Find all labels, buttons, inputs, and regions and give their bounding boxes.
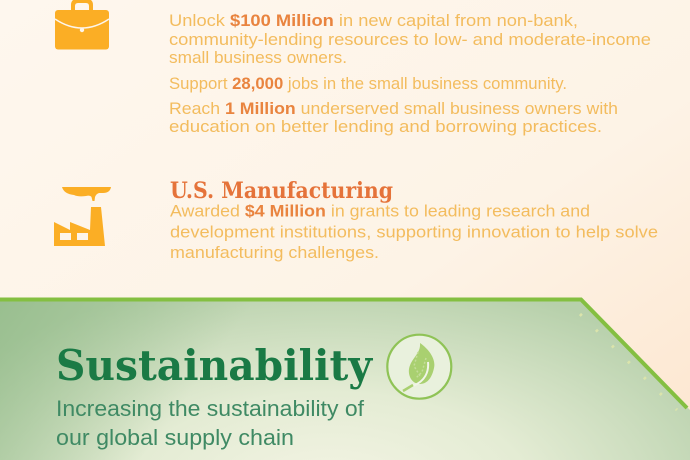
text block: small business outcomes: small business owners. <box>169 49 347 67</box>
text block: manufacturing grants: Awarded $4 Million in grants to leading research and <box>170 202 590 220</box>
heading: U.S. Manufacturing: U.S. Manufacturing <box>170 178 393 204</box>
text block: manufacturing grants: manufacturing challenges. <box>170 244 379 262</box>
heading: Sustainability: Sustainability <box>56 341 374 390</box>
text block: small business outcomes: Unlock $100 Million in new capital from non-bank, <box>169 12 578 30</box>
panel: sustainability <box>0 299 690 460</box>
icon: leaf in circle <box>387 335 451 399</box>
text block: manufacturing grants <box>170 202 658 262</box>
text block: small business outcomes <box>169 12 651 136</box>
icon: briefcase <box>55 0 109 50</box>
text block: small business outcomes: Support 28,000 jobs in the small business community. <box>169 75 567 93</box>
text block: small business outcomes: Reach 1 Million underserved small business owners with <box>169 100 618 118</box>
subtitle: Increasing the sustainability of <box>56 396 365 421</box>
subtitle: our global supply chain <box>56 425 294 450</box>
text block: small business outcomes: education on better lending and borrowing practices. <box>169 118 602 136</box>
icon: factory <box>54 187 111 246</box>
text block: small business outcomes: community-lending resources to low- and moderate-income <box>169 31 651 49</box>
subtitle <box>56 396 365 450</box>
text block: manufacturing grants: development institutions, supporting innovation to help solve <box>170 224 658 242</box>
